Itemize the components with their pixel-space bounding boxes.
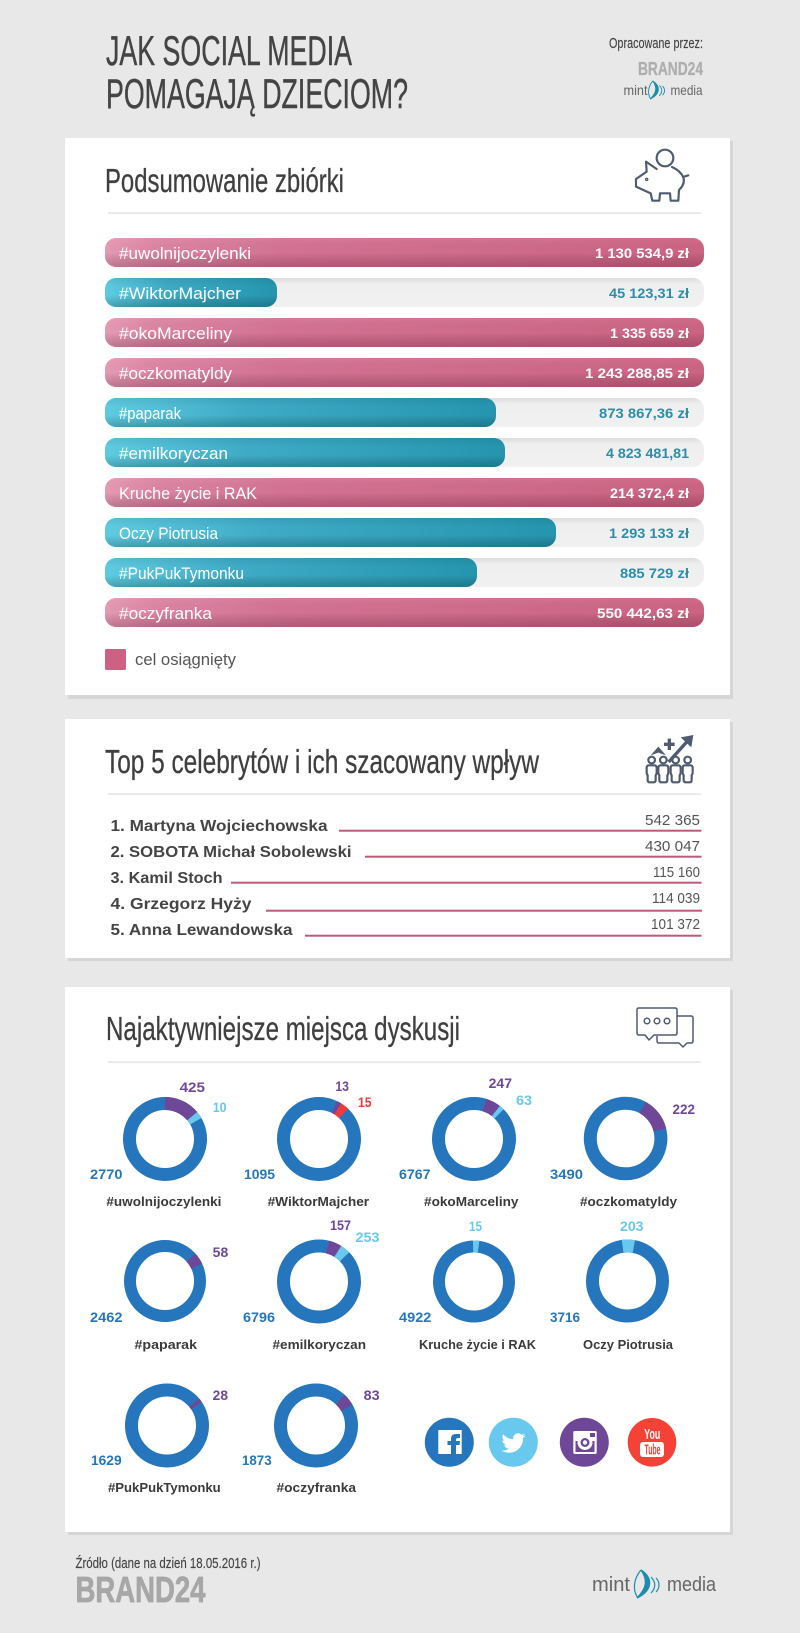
donut: #emilkoryczan: 6796 <box>243 1310 276 1325</box>
bar: #PukPukTymonku <box>105 558 704 587</box>
bar: Oczy Piotrusia <box>105 518 704 547</box>
bar: #oczyfranka: 550 442,63 zł <box>597 605 689 621</box>
title <box>106 27 408 117</box>
bar: #emilkoryczan: #emilkoryczan <box>119 444 228 463</box>
bar: #okoMarceliny <box>105 318 704 347</box>
ranking row 2: 430 047 <box>645 838 700 855</box>
icon: YouTube: You <box>644 1426 660 1443</box>
heading: discussion places: Najaktywniejsze miejsca dyskusji <box>106 1010 460 1047</box>
donut: #paparak <box>90 1232 229 1352</box>
donut: #oczyfranka <box>242 1375 380 1495</box>
bar: Oczy Piotrusia: Oczy Piotrusia <box>119 524 218 543</box>
donut: Oczy Piotrusia: 3716 <box>550 1310 580 1325</box>
donut: #oczkomatyldy <box>550 1091 695 1209</box>
icon: piggy bank <box>636 150 688 201</box>
donut: #okoMarceliny: #okoMarceliny <box>424 1194 519 1209</box>
icon: Twitter <box>489 1418 538 1467</box>
credits: prepared by: media <box>670 82 703 98</box>
ranking row 4: 114 039 <box>652 890 700 907</box>
donut: Kruche życie i RAK: Kruche życie i RAK <box>419 1337 537 1352</box>
donut: Oczy Piotrusia: Oczy Piotrusia <box>583 1337 674 1352</box>
title: JAK SOCIAL MEDIA <box>106 27 352 74</box>
ranking row 3: 3. Kamil Stoch <box>110 870 222 887</box>
donut: #WiktorMajcher: 1095 <box>244 1167 275 1182</box>
donut: #emilkoryczan: 253 <box>356 1230 380 1245</box>
title: POMAGAJĄ DZIECIOM? <box>106 70 408 117</box>
bar: #okoMarceliny: #okoMarceliny <box>119 324 233 343</box>
ranking row 5: 101 372 <box>651 916 700 933</box>
footer: source: BRAND24 <box>76 1569 206 1610</box>
ranking row 4 <box>110 890 702 913</box>
bar: Kruche życie i RAK <box>105 478 704 507</box>
donut: Kruche życie i RAK: 4922 <box>399 1310 431 1325</box>
footer: Mint Media logo: media <box>667 1573 717 1596</box>
icon: YouTube <box>628 1418 676 1467</box>
ranking row 5 <box>110 916 702 939</box>
credits: prepared by: mint <box>624 82 648 98</box>
icon: YouTube: Tube <box>644 1441 660 1458</box>
icon: people with growth arrow <box>647 735 693 782</box>
donut: #PukPukTymonku: 28 <box>213 1388 228 1403</box>
bar: #oczkomatyldy <box>105 358 704 387</box>
donut: #emilkoryczan: 157 <box>330 1218 351 1233</box>
donut: #WiktorMajcher: #WiktorMajcher <box>268 1194 369 1209</box>
donut: #okoMarceliny: 63 <box>516 1093 533 1108</box>
donut: #PukPukTymonku: 1629 <box>91 1453 122 1468</box>
donut: #uwolnijoczylenki: #uwolnijoczylenki <box>106 1194 221 1209</box>
ranking row 3: 115 160 <box>653 864 700 881</box>
donut: #paparak: #paparak <box>134 1337 198 1352</box>
donut: #oczkomatyldy: #oczkomatyldy <box>580 1194 678 1209</box>
bar: #uwolnijoczylenki <box>105 238 704 267</box>
donut: #oczkomatyldy: 222 <box>672 1102 695 1117</box>
panel: most active discussion places <box>65 987 733 1535</box>
donut: #okoMarceliny <box>399 1076 533 1209</box>
bar: #PukPukTymonku: #PukPukTymonku <box>119 564 244 583</box>
ranking row 2 <box>110 838 702 861</box>
ranking row 1: 1. Martyna Wojciechowska <box>110 818 328 835</box>
bar: #PukPukTymonku: 885 729 zł <box>620 565 689 581</box>
donut: #PukPukTymonku <box>91 1375 228 1495</box>
donut: #uwolnijoczylenki: 425 <box>180 1080 206 1095</box>
donut: #uwolnijoczylenki <box>90 1080 226 1209</box>
footer: Mint Media logo: mint <box>592 1573 630 1596</box>
legend: goal reached <box>105 649 236 670</box>
donut: #WiktorMajcher <box>244 1079 372 1209</box>
donut: #paparak: 2462 <box>90 1310 122 1325</box>
bar: #paparak: #paparak <box>119 404 181 423</box>
ranking row 1: 542 365 <box>645 812 700 829</box>
donut: Oczy Piotrusia <box>550 1219 674 1352</box>
bar: #oczyfranka: #oczyfranka <box>119 604 213 623</box>
credits: prepared by: Opracowane przez: <box>609 35 703 52</box>
bar: #WiktorMajcher: 45 123,31 zł <box>609 285 689 301</box>
panel: top 5 celebrities <box>65 719 733 961</box>
footer: Mint Media logo <box>592 1570 717 1598</box>
panel: fundraising summary <box>65 138 733 699</box>
bar: Kruche życie i RAK: 214 372,4 zł <box>610 485 689 501</box>
donut: Kruche życie i RAK: 15 <box>469 1219 482 1234</box>
bar: #WiktorMajcher <box>105 278 704 307</box>
ranking row 2: 2. SOBOTA Michał Sobolewski <box>110 844 352 861</box>
credits: prepared by <box>609 35 703 99</box>
donut: #oczyfranka: #oczyfranka <box>276 1480 357 1495</box>
donut: #oczyfranka: 83 <box>364 1388 380 1403</box>
bar: Kruche życie i RAK: Kruche życie i RAK <box>119 484 258 503</box>
legend: goal reached: cel osiągnięty <box>135 650 236 669</box>
bar: #uwolnijoczylenki: 1 130 534,9 zł <box>595 245 689 261</box>
bar: #oczyfranka <box>105 598 704 627</box>
donut: #paparak: 58 <box>213 1245 229 1260</box>
bar: #emilkoryczan <box>105 438 704 467</box>
icon: Facebook <box>425 1418 474 1467</box>
donut: #emilkoryczan: #emilkoryczan <box>272 1337 366 1352</box>
donut: #WiktorMajcher: 15 <box>358 1095 372 1110</box>
donut: #WiktorMajcher: 13 <box>335 1079 349 1094</box>
bar: #oczkomatyldy: #oczkomatyldy <box>119 364 232 383</box>
donut: Kruche życie i RAK <box>399 1219 537 1352</box>
donut: #oczkomatyldy: 3490 <box>550 1167 583 1182</box>
bar: #paparak: 873 867,36 zł <box>599 405 689 421</box>
donut: #okoMarceliny: 6767 <box>399 1167 430 1182</box>
bar: #oczkomatyldy: 1 243 288,85 zł <box>585 365 689 381</box>
donut: #PukPukTymonku: #PukPukTymonku <box>108 1480 221 1495</box>
bar: Oczy Piotrusia: 1 293 133 zł <box>609 525 689 541</box>
icon: Instagram <box>560 1418 609 1467</box>
donut: #oczyfranka: 1873 <box>242 1453 272 1468</box>
donut: Oczy Piotrusia: 203 <box>620 1219 644 1234</box>
ranking row 5: 5. Anna Lewandowska <box>110 922 293 939</box>
donut: #uwolnijoczylenki: 10 <box>213 1100 226 1115</box>
bar: #WiktorMajcher: #WiktorMajcher <box>119 284 241 303</box>
donut: #emilkoryczan <box>243 1218 380 1352</box>
bar: #uwolnijoczylenki: #uwolnijoczylenki <box>119 244 251 263</box>
heading: fundraising summary: Podsumowanie zbiórki <box>105 162 344 199</box>
bar: #emilkoryczan: 4 823 481,81 <box>606 445 689 461</box>
footer: source <box>76 1555 260 1610</box>
heading: top 5 celebrities: Top 5 celebrytów i ich szacowany wpływ <box>105 743 539 780</box>
bar: #paparak <box>105 398 704 427</box>
ranking row 4: 4. Grzegorz Hyży <box>110 896 252 913</box>
ranking row 1 <box>110 812 702 835</box>
credits: prepared by: BRAND24 <box>638 59 703 79</box>
icon: chat bubbles <box>637 1008 693 1047</box>
bar: #okoMarceliny: 1 335 659 zł <box>610 325 689 341</box>
footer: source: Źródło (dane na dzień 18.05.2016 r.) <box>76 1555 260 1572</box>
donut: #uwolnijoczylenki: 2770 <box>90 1167 122 1182</box>
donut: #okoMarceliny: 247 <box>489 1076 512 1091</box>
ranking row 3 <box>110 864 702 887</box>
